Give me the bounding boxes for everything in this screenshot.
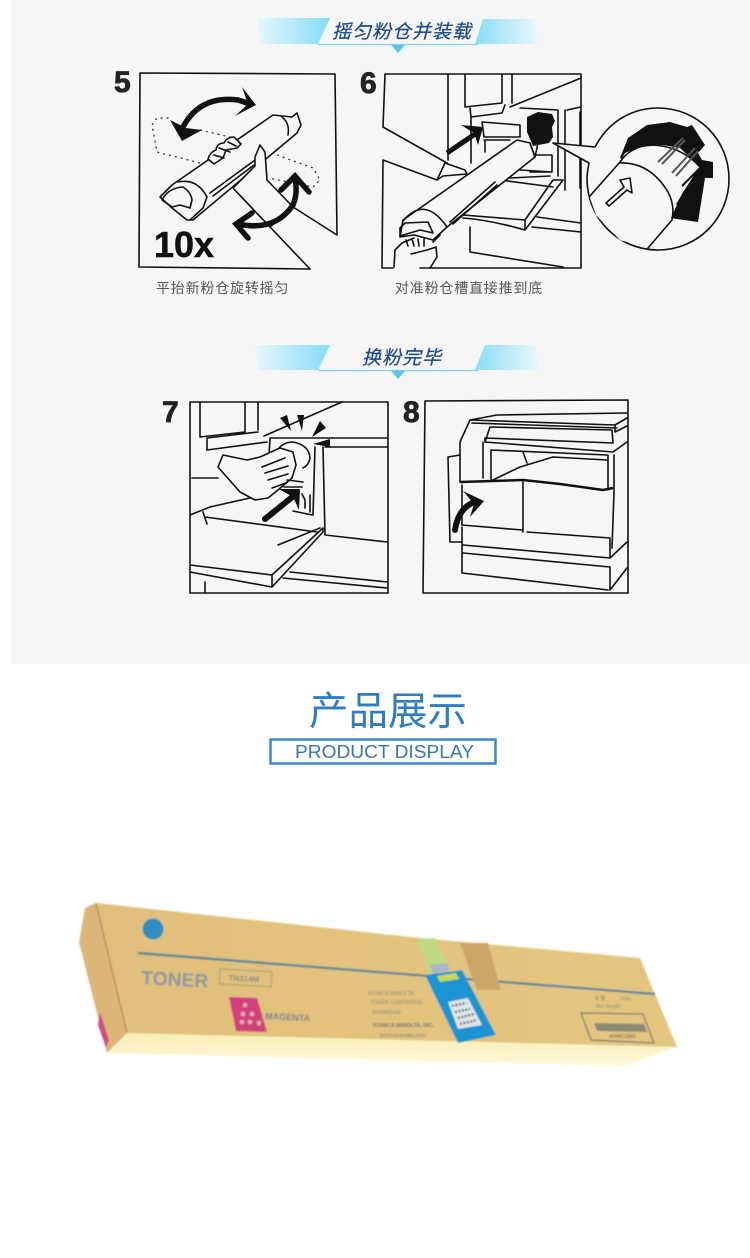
subtitle box: PRODUCT DISPLAY: PRODUCT DISPLAY xyxy=(295,741,474,762)
heading banner: 摇匀粉仓并装载: 摇匀粉仓并装载 xyxy=(332,21,473,43)
maker text: KONICA MINOLTA xyxy=(368,991,414,997)
step number 8: 8 xyxy=(403,396,420,429)
zoom detail circle xyxy=(553,108,729,250)
product: toner box xyxy=(79,903,677,1066)
maker text: SHANGHAI xyxy=(372,1010,401,1016)
caption step 5: 平抬新粉仓旋转摇匀 xyxy=(156,280,289,296)
weight text xyxy=(594,995,631,1010)
heading banner: 换粉完毕: 换粉完毕 xyxy=(362,347,443,369)
magenta colour square xyxy=(229,997,267,1032)
panel: instruction background xyxy=(11,0,750,664)
tray xyxy=(190,528,387,593)
barcode frame: A0WG3M0 xyxy=(609,1034,636,1040)
upper hand xyxy=(437,163,467,180)
step number 6: 6 xyxy=(360,67,377,100)
toner bottle xyxy=(160,113,301,220)
logo xyxy=(142,918,164,940)
heading banner: 换粉完毕 xyxy=(255,345,538,379)
box left end xyxy=(79,903,127,1053)
hands xyxy=(218,448,296,500)
icon: push arrow xyxy=(447,125,483,153)
weight text: Net Weight xyxy=(596,1004,621,1010)
end face magenta mark xyxy=(98,1012,109,1048)
tray xyxy=(463,180,581,267)
model box: TN314M xyxy=(228,973,260,984)
dotted path of shaking motion xyxy=(152,118,320,187)
barcode frame xyxy=(581,1013,654,1043)
lower hand xyxy=(394,235,440,268)
panel: step 8 illustration xyxy=(423,400,628,593)
icon: door arrow xyxy=(455,491,484,530)
model box xyxy=(219,969,272,987)
caption step 6: 对准粉仓槽直接推到底 xyxy=(395,280,543,296)
panel: step 7 illustration xyxy=(190,402,388,593)
blue stripe xyxy=(138,953,655,994)
knob circle xyxy=(275,442,310,468)
icon: rotate arrow bottom xyxy=(236,176,309,238)
count label: 10x xyxy=(154,224,214,265)
weight text: 净 重 xyxy=(594,995,605,1002)
panel: step 5 illustration xyxy=(139,73,337,269)
maker text: KONICA MINOLTA, INC. xyxy=(373,1023,435,1029)
lower arm lines xyxy=(233,188,310,269)
toner bottle xyxy=(400,140,538,240)
magenta label: MAGENTA xyxy=(265,1011,311,1023)
tape xyxy=(460,943,501,990)
step number 7: 7 xyxy=(162,396,179,429)
panel: step 6 illustration xyxy=(382,74,729,268)
blue QR tag xyxy=(425,970,496,1043)
slot silhouette xyxy=(527,112,555,146)
title: 产品展示: 产品展示 xyxy=(309,690,467,734)
toner label: TONER xyxy=(141,968,209,993)
subtitle box: PRODUCT DISPLAY xyxy=(270,740,496,764)
weight text: 115g xyxy=(620,996,631,1002)
maker text: konicaminolta.com xyxy=(380,1033,426,1039)
maker text xyxy=(368,991,435,1039)
green tag xyxy=(417,938,450,973)
icon: rotate arrow top xyxy=(170,87,256,141)
box front face xyxy=(96,903,677,1047)
step number 5: 5 xyxy=(114,66,131,99)
maker text: TONER CARTRIDGE xyxy=(370,1000,423,1006)
hand gripping toner xyxy=(208,137,293,227)
heading banner: 摇匀粉仓并装载 xyxy=(257,18,538,53)
click marks xyxy=(280,415,330,447)
icon: push arrow xyxy=(265,489,300,519)
box bottom face xyxy=(108,1033,677,1066)
